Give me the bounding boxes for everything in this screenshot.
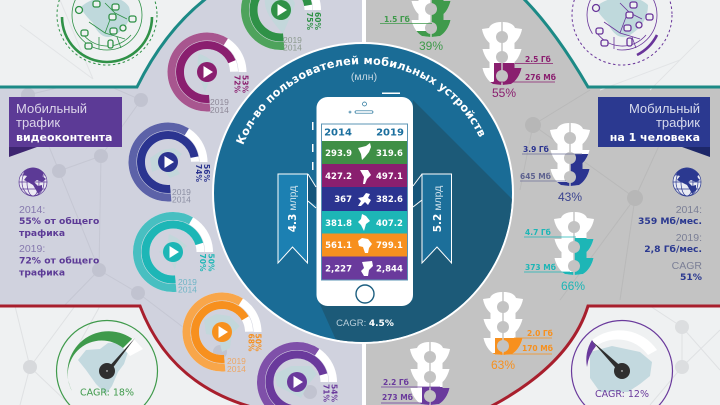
ring chart: South America video share: 2019 — [210, 97, 229, 107]
background: right half — [366, 0, 720, 405]
ring chart: India video share: 2019 — [178, 277, 197, 287]
ring chart: North America video share — [242, 0, 322, 53]
traffic light: Asia: 2.2 Гб — [383, 378, 409, 387]
table row: Asia — [322, 256, 407, 280]
traffic light: Europe: 43% — [558, 190, 582, 204]
ring chart: Asia video share: 54% — [330, 384, 338, 402]
table row: Europe: 382.6 — [376, 195, 403, 205]
table row: Europe — [322, 187, 407, 211]
traffic light: Europe — [520, 123, 590, 204]
table row: India: 381.8 — [325, 219, 352, 229]
ring chart: North America video share: 2014 — [283, 42, 302, 52]
panel: top right — [522, 0, 720, 90]
banner: video traffic: трафик — [16, 115, 60, 130]
traffic light: Europe: 645 Мб — [520, 172, 551, 181]
traffic light: Africa: 170 Мб — [522, 344, 553, 353]
table row: Africa — [322, 234, 407, 256]
banner: traffic per person: трафик — [656, 115, 700, 130]
traffic light: Europe: 3.9 Гб — [523, 145, 549, 154]
text: video traffic stats — [19, 204, 99, 278]
ring chart: Europe video share: 2019 — [172, 187, 191, 197]
ribbon: 2019 total — [413, 174, 452, 263]
ring chart: Europe video share — [130, 124, 211, 204]
ring chart: Africa video share: 50% — [254, 334, 262, 352]
ring chart: Africa video share: 68% — [246, 334, 256, 352]
ring chart: North America video share: 75% — [305, 12, 314, 30]
panel: bottom right — [488, 306, 720, 405]
gauge: CAGR 12%: CAGR: 12% — [595, 389, 649, 400]
ring chart: South America video share — [169, 34, 250, 115]
text: per-person stats: 2019: — [676, 232, 702, 244]
table row: India — [322, 211, 407, 234]
ring chart: India video share — [134, 213, 216, 294]
ring chart: India video share: 2014 — [178, 284, 197, 294]
table header: 2014 — [324, 128, 352, 138]
table row: Asia: 2,227 — [325, 264, 352, 274]
ribbon: 2014 total: 4.3 млрд — [287, 186, 299, 232]
traffic light: India: 66% — [561, 279, 585, 293]
ring chart: India video share: 50% — [206, 254, 216, 272]
table row: North America: 293.9 — [325, 149, 352, 159]
text: video traffic stats: 55% от общего — [19, 216, 99, 227]
icon: left globe — [19, 168, 47, 196]
traffic light: South America — [482, 22, 556, 100]
banner: traffic per person: на 1 человека — [610, 131, 700, 144]
banner: traffic per person: Мобильный — [629, 101, 700, 116]
panel: top left — [0, 0, 208, 87]
banner: video traffic — [9, 97, 122, 157]
banner: video traffic: видеоконтента — [16, 131, 112, 144]
curved title: Кол-во пользователей мобильных устройств — [236, 56, 484, 144]
gauge: CAGR 18% — [56, 320, 158, 405]
ring chart: South America video share: 2014 — [210, 105, 229, 115]
ring chart: South America video share: 72% — [232, 75, 242, 93]
table row: Africa: 799.1 — [376, 241, 403, 251]
icon: right globe — [673, 168, 701, 196]
ribbon: 2019 total: 5.2 млрд — [432, 186, 444, 232]
text: per-person stats: CAGR — [672, 260, 702, 272]
icon: purple circuit globe — [572, 0, 672, 65]
ring chart: Europe video share: 74% — [194, 164, 203, 182]
traffic light: India: 373 Мб — [525, 263, 556, 272]
traffic light: Asia: 273 Мб — [382, 393, 413, 402]
table header: 2019 — [376, 128, 404, 138]
text: per-person stats: 2014: — [676, 204, 702, 216]
table header — [324, 128, 404, 138]
table row: North America — [322, 141, 407, 164]
table row: South America: 427.2 — [325, 172, 352, 182]
panel: bottom left — [0, 306, 255, 405]
text: video traffic stats: 2019: — [19, 243, 45, 255]
traffic light: Africa: 63% — [491, 358, 515, 372]
text: video traffic stats: 72% от общего — [19, 256, 99, 266]
text: video traffic stats: трафика — [19, 228, 65, 239]
ring chart: Asia video share: 71% — [322, 384, 330, 402]
table row: India: 407.2 — [376, 219, 403, 229]
phone — [312, 92, 413, 306]
gauge: CAGR 18%: CAGR: 18% — [80, 388, 134, 398]
traffic light: South America: 2.5 Гб — [525, 55, 551, 64]
gauge: CAGR 12% — [572, 320, 672, 405]
traffic light: North America — [380, 0, 451, 53]
traffic light: North America: 1.5 Гб — [384, 15, 410, 24]
text: video traffic stats: 2014: — [19, 204, 45, 216]
traffic light: South America: 276 Мб — [525, 73, 556, 82]
background: left half — [0, 0, 362, 405]
table row: Asia: 2,844 — [376, 264, 403, 274]
ring chart: South America video share: 53% — [240, 75, 250, 93]
table row: South America — [322, 164, 407, 187]
traffic light: India: 4.7 Гб — [525, 228, 551, 237]
traffic light: Africa: 2.0 Гб — [527, 329, 553, 338]
ring chart: Africa video share: 2014 — [227, 364, 246, 374]
traffic light: Africa — [483, 292, 553, 372]
banner: video traffic: Мобильный — [16, 101, 87, 116]
text: CAGR: CAGR: 4.5% — [336, 318, 394, 329]
panel: central circle — [212, 42, 514, 344]
text: per-person stats: 359 Мб/мес. — [638, 216, 702, 227]
ring chart: Africa video share: 2019 — [227, 356, 246, 366]
ring chart: India video share: 70% — [198, 254, 207, 272]
ring chart: Europe video share: 2014 — [172, 194, 191, 204]
ribbon: 2014 total — [278, 174, 317, 263]
ring chart: Asia video share — [258, 343, 338, 405]
banner: traffic per person — [598, 97, 710, 157]
traffic light: South America: 55% — [492, 86, 516, 100]
table row: Europe: 367 — [334, 195, 352, 205]
ring chart: Africa video share — [184, 294, 262, 374]
text: per-person stats — [638, 204, 702, 283]
traffic light: India — [524, 212, 594, 293]
table row: South America: 497.1 — [376, 172, 403, 182]
traffic light: Asia — [381, 342, 450, 405]
text: per-person stats: 2,8 Гб/мес. — [644, 244, 702, 255]
text: per-person stats: 51% — [680, 272, 702, 283]
icon: green circuit globe — [57, 0, 157, 65]
ring chart: North America video share: 60% — [313, 12, 322, 30]
table row: Africa: 561.1 — [325, 241, 352, 251]
traffic light: North America: 39% — [419, 39, 443, 53]
text: video traffic stats: трафика — [19, 268, 65, 278]
ring chart: North America video share: 2019 — [283, 35, 302, 45]
table row: North America: 319.6 — [376, 149, 403, 159]
subtitle: units: (млн) — [351, 71, 377, 83]
ring chart: Europe video share: 56% — [202, 164, 211, 182]
